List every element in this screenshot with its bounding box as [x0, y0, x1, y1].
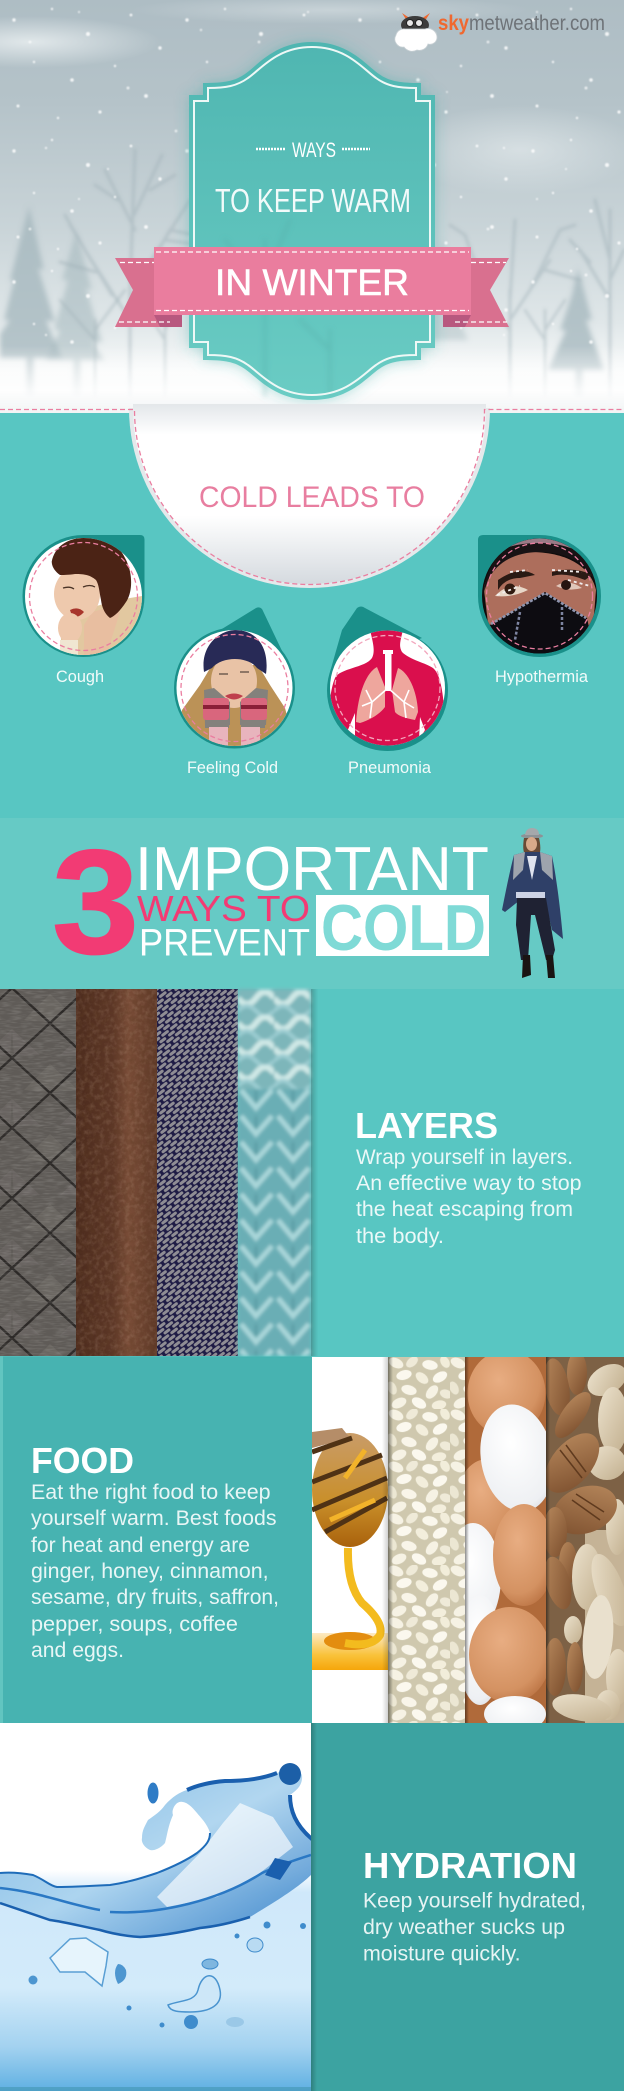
headline box: cold: COLD [321, 891, 486, 964]
body: hydration: dry weather sucks up [363, 1915, 565, 1939]
body: food [31, 1480, 279, 1662]
body: food: Eat the right food to keep [31, 1480, 271, 1504]
label: feeling cold: Feeling Cold [187, 759, 278, 777]
heading: layers: LAYERS [355, 1105, 498, 1146]
photo: almonds and cashews [546, 1357, 624, 1723]
title line: ways: WAYS [292, 139, 336, 162]
photo: water splash [0, 1723, 313, 2091]
illustration: lungs in torso [330, 630, 444, 746]
body: food: sesame, dry fruits, saffron, [31, 1585, 279, 1609]
panel: hydration text [311, 1723, 624, 2091]
body: hydration: Keep yourself hydrated, [363, 1888, 586, 1912]
label: pneumonia: Pneumonia [348, 759, 432, 777]
headline: prevent: PREVENT [139, 922, 310, 964]
icon: owl cloud [395, 13, 437, 51]
title line: in winter: IN WINTER [215, 262, 409, 303]
fabric: brown suede [76, 989, 157, 1356]
headline: ways to: WAYS TO [137, 888, 310, 929]
item: feeling cold [174, 607, 296, 777]
body: food: for heat and energy are [31, 1533, 250, 1557]
photo: girl in hat and mittens [182, 630, 286, 746]
fabric: blue knit [238, 989, 311, 1356]
photo: sesame seeds [388, 1357, 465, 1723]
decorative squiggle left [256, 148, 285, 150]
section: layers fabrics [0, 989, 318, 1356]
body: hydration: moisture quickly. [363, 1942, 521, 1966]
ribbon [115, 247, 509, 327]
panel: food text [0, 1356, 312, 1723]
banner: 3 important ways to prevent cold [0, 818, 624, 989]
panel: layers text [355, 1105, 582, 1248]
fabric: denim [157, 989, 238, 1356]
logo wordmark: skymetweather.com [438, 11, 605, 35]
photo: frozen man in mask [484, 537, 598, 660]
headline: important: IMPORTANT [135, 835, 489, 904]
body: food: ginger, honey, cinnamon, [31, 1559, 269, 1583]
hero: snowy forest background [0, 0, 624, 414]
decorative squiggle right [342, 148, 370, 150]
title line: to keep warm: TO KEEP WARM [215, 182, 411, 219]
fabric: quilted leather [0, 989, 76, 1356]
heading: hydration: HYDRATION [363, 1845, 577, 1886]
big number 3: 3 [52, 820, 139, 985]
body: layers: Wrap yourself in layers. [356, 1145, 573, 1169]
item: cough [22, 535, 145, 686]
heading: cold leads to: COLD LEADS TO [199, 481, 425, 514]
body: layers: An effective way to stop [356, 1171, 582, 1195]
figure: woman in winter coat [502, 828, 563, 978]
item: hypothermia [478, 535, 601, 686]
body: layers: the heat escaping from [356, 1197, 573, 1221]
body: food: pepper, soups, coffee [31, 1612, 238, 1636]
label: hypothermia: Hypothermia [495, 668, 589, 686]
label: cough: Cough [56, 668, 104, 686]
photo: woman coughing [52, 538, 142, 655]
body: food: yourself warm. Best foods [31, 1506, 276, 1530]
body: layers: the body. [356, 1224, 444, 1248]
item: pneumonia [327, 606, 448, 777]
section: cold leads to [0, 404, 624, 818]
photo: eggs [465, 1357, 546, 1723]
photo: honey dipper [312, 1357, 388, 1723]
title badge [189, 42, 435, 400]
body: hydration [363, 1888, 586, 1966]
body: layers [356, 1145, 582, 1248]
logo: skymetweather.com [395, 11, 605, 51]
heading: food: FOOD [31, 1440, 134, 1481]
body: food: and eggs. [31, 1638, 124, 1662]
